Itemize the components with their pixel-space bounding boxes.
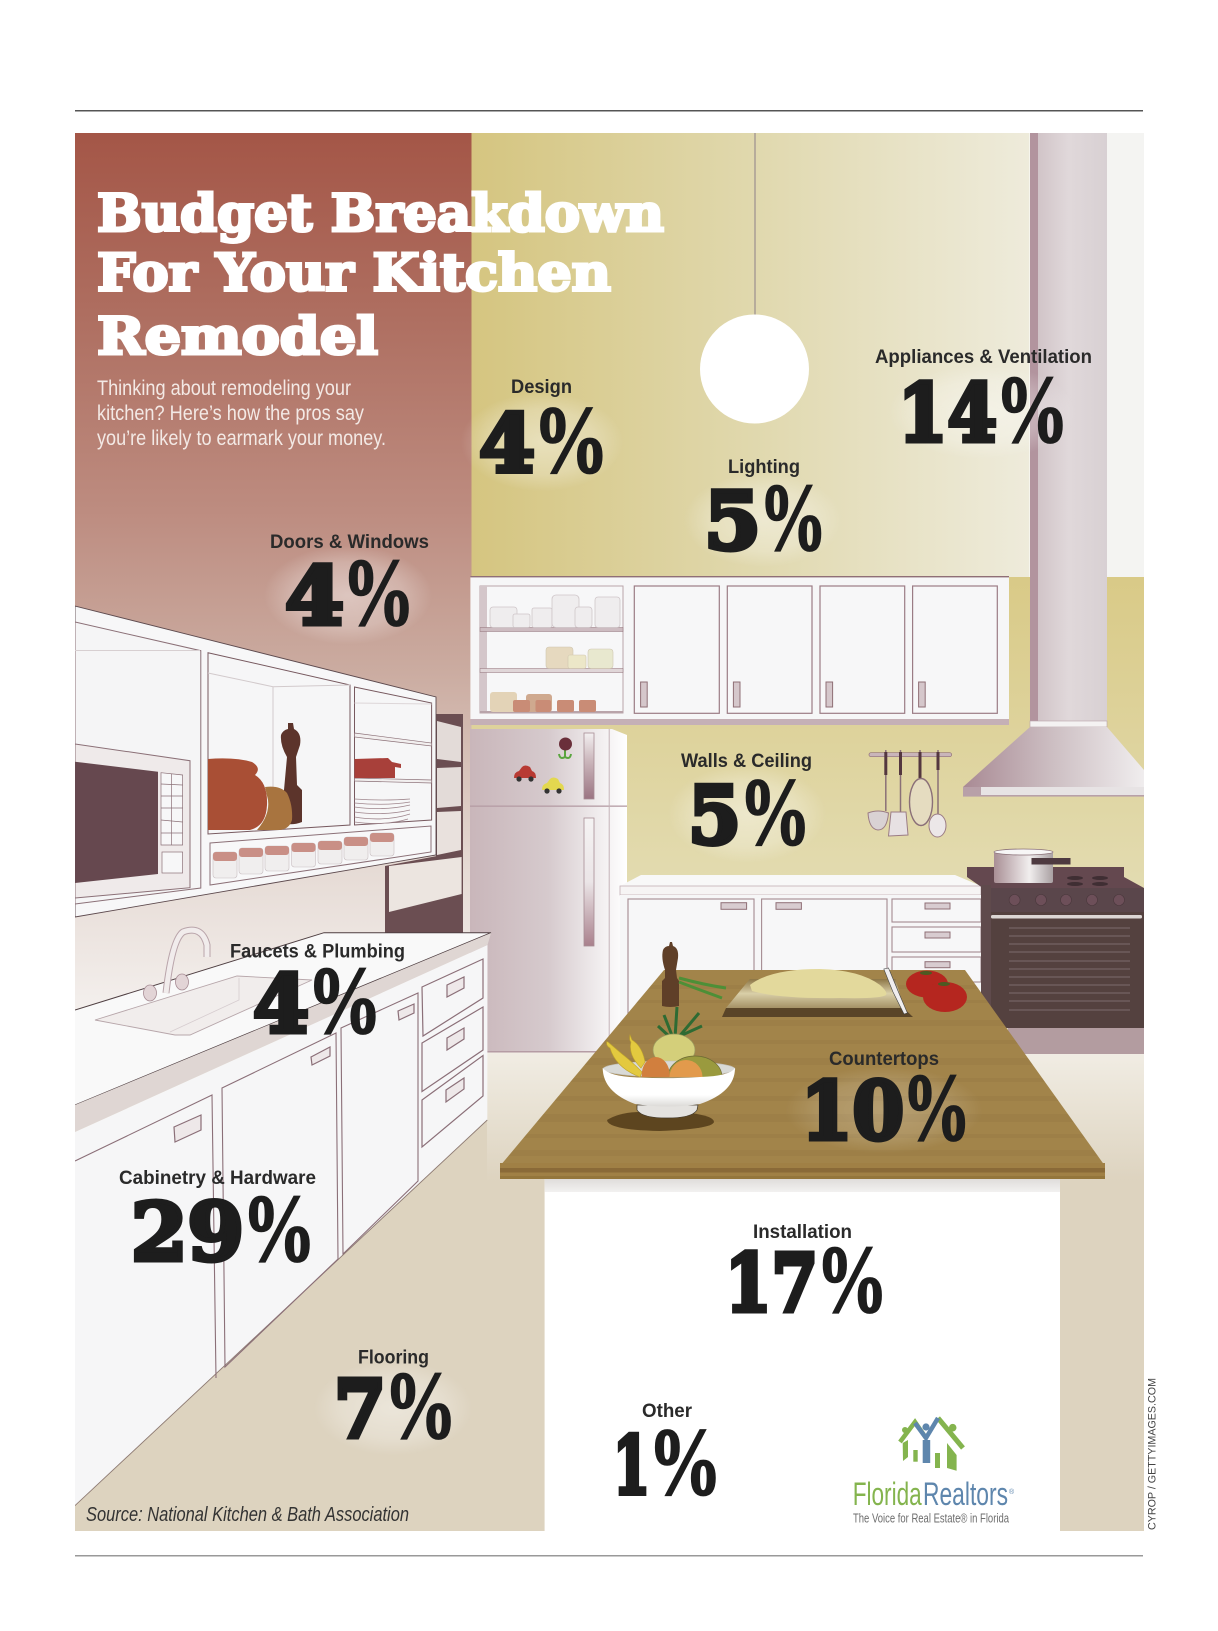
stat: faucets and plumbing [230,942,405,1054]
tomatoes [906,970,967,1012]
right shelf cabinet [354,687,432,825]
fridge handle lower [584,818,594,946]
upper yellow wall [472,133,1030,577]
base cabinet door [75,1095,216,1378]
title: Remodel [97,307,378,367]
stat: design: % [533,386,609,493]
stat: installation: % [816,1226,888,1332]
open shelf unit [480,586,623,713]
stat: flooring: 7 [334,1362,386,1456]
stat: design: 4 [479,396,535,490]
bowl shadow [607,1112,714,1131]
stat: design [479,377,609,493]
cabinet door [913,586,997,713]
photo credit: CYROP / GETTYIMAGES.COM [1146,1378,1158,1530]
upper cabinets [470,576,1009,725]
stat: other: % [648,1408,722,1515]
stat: lighting: % [759,464,827,570]
left lower counter [75,930,491,1506]
countertop surface [75,933,491,1105]
whisk [910,778,932,826]
stat: flooring: Flooring [358,1348,429,1368]
kitchen illustration [75,133,1144,1531]
stat: flooring: % [384,1352,457,1458]
stat: other [613,1401,722,1515]
stat: lighting: 5 [704,474,761,568]
pepper mill [281,723,302,824]
knife [884,968,907,1014]
title [97,184,664,367]
stat: walls and ceiling [681,751,812,865]
stat: walls and ceiling: Walls & Ceiling [681,751,812,772]
cabinet door [727,586,812,713]
center open cabinet [208,653,350,834]
door handles [641,682,925,707]
red pot [354,758,401,778]
fridge handle upper [584,733,594,799]
faucet [144,930,207,1001]
stat: faucets and plumbing: Faucets & Plumbing [230,942,405,962]
pendant lamp [700,133,809,424]
left upper cabinets [75,606,436,917]
green onions [679,978,726,998]
logo icon: houses with figures [900,1418,963,1471]
range hood [963,133,1144,797]
source note: Source: National Kitchen & Bath Association [86,1504,409,1526]
bananas [607,1035,645,1077]
stat: installation: 17 [725,1236,818,1330]
intro text [97,377,386,450]
bowl foot [637,1105,698,1118]
sink [95,976,312,1035]
intro text: you’re likely to earmark your money. [97,427,386,450]
cabinet door [634,586,719,713]
spice shelf [210,826,431,885]
island base [545,1178,1060,1531]
stove knobs [1009,894,1124,906]
magnet: red car [514,766,536,782]
number glows [263,364,1077,1456]
logo: Florida Realtors: The Voice for Real Estate® in Florida [853,1511,1010,1526]
stat: countertops: Countertops [829,1049,939,1070]
intro text: Thinking about remodeling your [97,377,351,400]
small jar [257,787,292,830]
logo: Florida Realtors: ® [1009,1488,1015,1496]
stat: faucets and plumbing: % [307,946,382,1054]
back base cabinets [620,875,981,1052]
stat: cabinetry and hardware [119,1168,316,1282]
bread loaf [750,969,886,998]
top rule [75,110,1143,112]
oven handle [991,915,1142,918]
magnet: yellow car [542,778,564,794]
green fruit [668,1056,722,1098]
ladle [868,811,888,830]
floor highlight [487,1052,1144,1154]
stat: flooring [334,1348,457,1458]
stat: lighting: Lighting [728,457,800,478]
hanging utensils [868,750,952,837]
wood island top [480,970,1130,1179]
stat: other: Other [642,1401,693,1422]
stat: installation: Installation [753,1222,852,1243]
stat: installation [725,1222,888,1332]
bottom rule [75,1555,1143,1556]
left cabinet with microwave [75,622,201,904]
microwave keypad [161,773,183,873]
refrigerator [470,729,627,1052]
floor [75,1000,1144,1531]
base cabinet body [75,945,488,1506]
fruit bowl [603,1007,735,1131]
title: For Your Kitchen [97,244,611,304]
stat: cabinetry and hardware: 29 [131,1185,244,1279]
stat: other: 1 [613,1418,650,1512]
stat: cabinetry and hardware: % [242,1174,316,1282]
stat: faucets and plumbing: 4 [253,957,309,1051]
pepper mill on island [662,942,679,1007]
round pot [208,758,267,830]
stat: doors and windows [270,532,429,646]
lower yellow wall [472,577,1144,897]
spoon [929,814,946,837]
stat: doors and windows: Doors & Windows [270,532,429,553]
stat: doors and windows: % [342,538,415,646]
red wall [75,133,472,1033]
stat: appliances and ventilation: 14 [898,366,997,460]
counter edge [75,933,491,1132]
magnet: flower [559,738,572,758]
bowl body [603,1068,735,1106]
stat: cabinetry and hardware: Cabinetry & Hardware [119,1168,316,1189]
stat: appliances and ventilation: % [995,356,1069,462]
stat: design: Design [511,377,572,398]
stat: appliances and ventilation [875,347,1092,462]
white wall strip [1106,133,1144,577]
saucepan [994,849,1070,883]
logo: Florida Realtors [853,1418,1015,1526]
bowl inner rim [603,1061,735,1077]
logo: Florida Realtors: Florida [853,1476,922,1512]
cutting board and bread [722,968,913,1017]
cabinet door [820,586,905,713]
stat: appliances and ventilation: Appliances & Ventilation [875,347,1092,368]
stat: walls and ceiling: % [739,758,811,865]
stove [967,849,1144,1054]
stat: countertops [801,1049,971,1160]
base cabinet door [222,1033,338,1367]
stat: doors and windows: 4 [285,549,344,643]
stat: countertops: % [902,1054,971,1160]
stat: countertops: 10 [801,1064,904,1158]
cabinet pulls [174,977,464,1142]
pineapple [653,1007,702,1066]
oven vents [1009,928,1130,1010]
stat: lighting [704,457,827,570]
stacked plates [354,799,410,823]
orange [670,1060,702,1094]
back dark cabinet [385,714,463,933]
drawers [422,959,483,1147]
microwave screen [75,762,158,883]
stat: walls and ceiling: 5 [688,768,741,862]
spatula [888,812,908,836]
intro text: kitchen? Here’s how the pros say [97,402,364,425]
title: Budget Breakdown [97,184,664,244]
logo: Florida Realtors: Realtors [923,1476,1008,1512]
base cabinet door [341,993,418,1254]
burners [1067,876,1108,886]
orange [642,1057,670,1093]
